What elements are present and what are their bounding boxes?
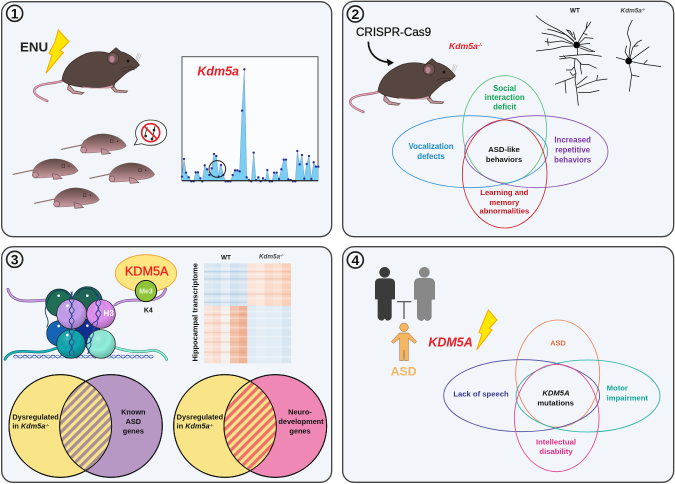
label: ASD: ASD bbox=[391, 365, 417, 379]
front histones bbox=[57, 299, 87, 329]
histone tails bbox=[5, 289, 167, 359]
label: learning and memory abnormalities: Learning and bbox=[480, 188, 529, 197]
label: intellectual disability: Intellectual bbox=[536, 438, 576, 447]
Venn: dysregulated and neurodevelopment genes: development bbox=[278, 417, 324, 426]
Venn: dysregulated and known ASD genes: genes bbox=[123, 427, 144, 436]
icon: WT neuron bbox=[536, 16, 607, 106]
step number 1: 1 bbox=[11, 5, 19, 21]
chart: Kdm5a linkage plot bbox=[181, 57, 319, 182]
step number 2: 2 bbox=[351, 6, 359, 22]
step number 3: 3 bbox=[11, 251, 19, 267]
label: intellectual disability: disability bbox=[539, 447, 573, 456]
panel 2: CRISPR-Cas9 model bbox=[343, 1, 674, 237]
label: learning and memory abnormalities: abnormalities bbox=[479, 207, 529, 216]
Venn: dysregulated and neurodevelopment genes: Dysregulated bbox=[177, 412, 223, 421]
diagram: ASD-like behaviors Venn bbox=[392, 76, 608, 228]
label: learning and memory abnormalities: memory bbox=[489, 198, 520, 207]
chart: Kdm5a linkage plot: Kdm5a bbox=[197, 64, 239, 78]
ellipse: ASD bbox=[516, 320, 600, 427]
Venn: dysregulated and known ASD genes: Dysregulated bbox=[12, 412, 59, 421]
label: Kdm5a knockout: -/- bbox=[478, 42, 483, 47]
Venn: dysregulated and neurodevelopment genes bbox=[174, 375, 327, 477]
Venn: dysregulated and known ASD genes: Kdm5a bbox=[21, 422, 45, 431]
heatmap: hippocampal transcriptome bbox=[204, 263, 291, 363]
label: social interaction deficit: Social bbox=[493, 84, 516, 93]
icon: speech bubble with crossed-out notes bbox=[134, 120, 167, 145]
illustration: nucleosome bbox=[5, 287, 167, 359]
icon: mouse bbox=[350, 59, 457, 112]
label: motor impairment: impairment bbox=[607, 394, 648, 403]
label: vocalization defects: defects bbox=[417, 152, 445, 161]
Venn: dysregulated and known ASD genes: Known bbox=[121, 408, 146, 417]
ellipse: motor impairment bbox=[516, 360, 660, 432]
ellipse: vocalization bbox=[392, 116, 548, 188]
Venn: dysregulated and known ASD genes bbox=[9, 375, 162, 477]
ellipse: social interaction bbox=[463, 76, 547, 183]
icon: adult mouse bbox=[34, 48, 141, 101]
label: social interaction deficit: deficit bbox=[493, 103, 517, 112]
ellipse: learning and memory bbox=[462, 120, 547, 228]
icon: lightning bolt bbox=[46, 30, 69, 73]
Venn: dysregulated and neurodevelopment genes: in bbox=[177, 422, 185, 431]
label: ENU: ENU bbox=[20, 40, 48, 55]
highlights bbox=[57, 294, 89, 336]
back histones bbox=[46, 289, 73, 316]
label: KDM5A gene: KDM5A bbox=[428, 336, 473, 350]
Venn: dysregulated and neurodevelopment genes: Neuro- bbox=[288, 408, 312, 417]
label: WT: WT bbox=[570, 7, 580, 14]
icon: pup bbox=[90, 163, 155, 183]
pedigree connector bbox=[397, 302, 411, 319]
callout: KDM5A with Me3: KDM5A bbox=[125, 264, 169, 278]
label: increased repetitive behaviors: repetitive bbox=[555, 146, 591, 155]
label: Kdm5a knockout: Kdm5a bbox=[449, 41, 478, 51]
diagram: KDM5A mutations Venn bbox=[444, 320, 660, 472]
label: lack of speech: Lack of speech bbox=[453, 390, 509, 399]
label: CRISPR-Cas9: CRISPR-Cas9 bbox=[356, 26, 431, 39]
ellipse: intellectual disability bbox=[514, 364, 599, 472]
label: KDM5A mutations: mutations bbox=[537, 399, 574, 408]
label: Kdm5a knockout neuron: Kdm5a bbox=[621, 7, 642, 14]
label: motor impairment: Motor bbox=[607, 384, 628, 393]
Venn: dysregulated and known ASD genes: ASD bbox=[126, 417, 141, 426]
DNA linker strands bbox=[13, 355, 153, 358]
icon: mother bbox=[414, 267, 435, 321]
icon: pup bbox=[13, 159, 78, 179]
label: KDM5A mutations: KDM5A bbox=[542, 389, 570, 398]
label: increased repetitive behaviors: behaviors bbox=[554, 156, 592, 165]
icon: pup bbox=[35, 188, 99, 208]
Venn: dysregulated and known ASD genes: -/- bbox=[45, 422, 50, 427]
callout: KDM5A with Me3: K4 bbox=[144, 308, 153, 315]
label: Kdm5a knockout neuron: -/- bbox=[642, 7, 646, 11]
label: Kdm5a knockout heatmap column: -/- bbox=[280, 253, 284, 257]
label: H3: H3 bbox=[104, 309, 114, 318]
label: increased repetitive behaviors: Increased bbox=[554, 136, 591, 145]
DNA wrap bbox=[45, 288, 101, 356]
step number 1 bbox=[7, 5, 23, 21]
label: ASD: ASD bbox=[550, 339, 566, 348]
label: ASD-like behaviors: behaviors bbox=[486, 155, 522, 164]
icon: father bbox=[375, 267, 395, 321]
step number 2 bbox=[347, 6, 363, 22]
panel 1: ENU mutagenesis screen bbox=[2, 2, 332, 237]
Venn: dysregulated and neurodevelopment genes: genes bbox=[289, 427, 311, 436]
ellipse: lack of speech bbox=[444, 360, 600, 432]
arrow: CRISPR to mouse bbox=[368, 42, 394, 66]
step number 3 bbox=[7, 251, 23, 267]
label: vocalization defects: Vocalization bbox=[408, 142, 454, 151]
Venn: dysregulated and neurodevelopment genes: Kdm5a bbox=[185, 422, 210, 431]
panel 3: chromatin and transcriptome bbox=[2, 247, 332, 482]
icon: pup bbox=[62, 134, 126, 154]
label: WT heatmap column: WT bbox=[221, 254, 231, 261]
icon: lightning bolt bbox=[477, 310, 497, 350]
ellipse: repetitive behaviors bbox=[465, 116, 608, 188]
step number 4 bbox=[347, 252, 363, 268]
callout: KDM5A with Me3 bbox=[115, 255, 177, 315]
Venn: dysregulated and known ASD genes: in bbox=[12, 422, 21, 431]
label: social interaction deficit: interaction bbox=[485, 93, 525, 102]
Venn: dysregulated and neurodevelopment genes: -/- bbox=[210, 422, 214, 427]
step number 4: 4 bbox=[351, 252, 359, 268]
callout: KDM5A with Me3: Me3 bbox=[139, 289, 153, 296]
panel 4: human KDM5A mutations bbox=[343, 247, 674, 482]
label: Kdm5a knockout heatmap column: Kdm5a bbox=[259, 253, 280, 260]
label: hippocampal transcriptome: Hippocampal transcriptome bbox=[192, 263, 199, 361]
icon: Kdm5a knockout neuron bbox=[616, 20, 661, 92]
label: ASD-like behaviors: ASD-like bbox=[488, 145, 520, 154]
icon: child bbox=[391, 323, 417, 361]
